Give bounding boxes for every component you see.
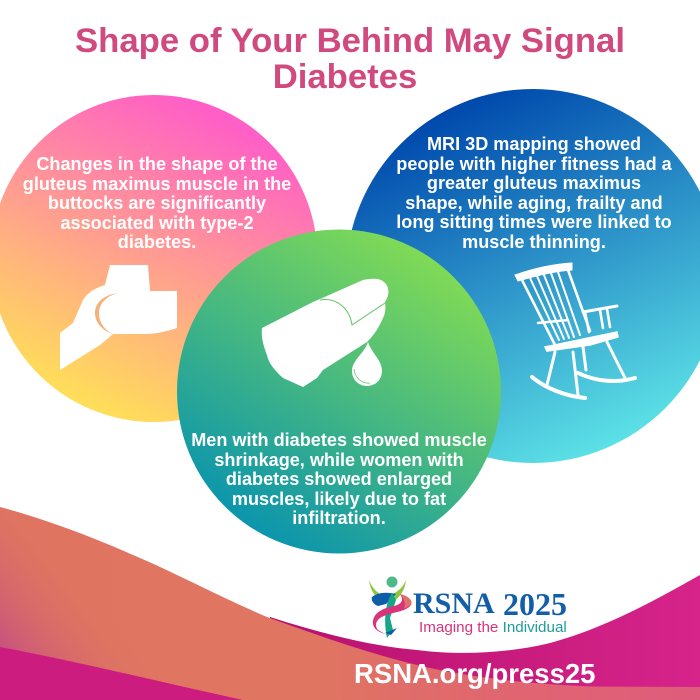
logo: RSNA 2025 wordmark: 2025	[503, 586, 567, 622]
title	[75, 22, 625, 96]
text: right circle: shape, while aging, frailty and	[405, 193, 663, 213]
text: center circle	[191, 430, 487, 528]
text: left circle: gluteus maximus muscle in the	[23, 174, 291, 194]
url: RSNA.org/press25	[354, 658, 595, 689]
text: right circle: MRI 3D mapping showed	[427, 134, 641, 154]
title: Shape of Your Behind May Signal	[75, 22, 625, 60]
icon: muscle with drop	[262, 279, 388, 387]
text: right circle: long sitting times were linked to	[396, 212, 672, 232]
magenta wave	[270, 575, 700, 700]
text: right circle	[396, 134, 672, 252]
text: center circle: infiltration.	[292, 508, 386, 528]
title: Diabetes	[273, 58, 417, 96]
text: center circle: Men with diabetes showed muscle	[191, 430, 487, 450]
orange wave shading	[0, 507, 267, 700]
text: left circle: Changes in the shape of the	[36, 154, 278, 174]
icon: gluteus muscle	[60, 265, 177, 370]
text: center circle: muscles, likely due to fat	[232, 489, 446, 509]
logo: tagline: Imaging the Individual	[419, 619, 567, 636]
text: left circle: buttocks are significantly	[48, 193, 266, 213]
logo figure	[369, 576, 411, 638]
text: center circle: shrinkage, while women with	[214, 450, 464, 470]
text: center circle: diabetes showed enlarged	[226, 469, 452, 489]
circle: green	[177, 230, 501, 554]
circle: blue	[346, 89, 700, 463]
text: right circle: people with higher fitness had a	[396, 154, 672, 174]
text: left circle	[23, 154, 291, 252]
magenta corner	[0, 647, 243, 700]
logo: RSNA 2025 wordmark	[413, 586, 567, 622]
text: right circle: muscle thinning.	[462, 232, 606, 252]
circle: pink yellow	[0, 95, 318, 422]
text: right circle: greater gluteus maximus	[427, 173, 641, 193]
text: left circle: diabetes.	[118, 232, 196, 252]
text: left circle: associated with type-2	[60, 213, 254, 233]
icon: rocking chair	[515, 263, 635, 398]
logo: RSNA 2025 wordmark: RSNA	[413, 587, 495, 620]
orange wave	[0, 507, 700, 700]
